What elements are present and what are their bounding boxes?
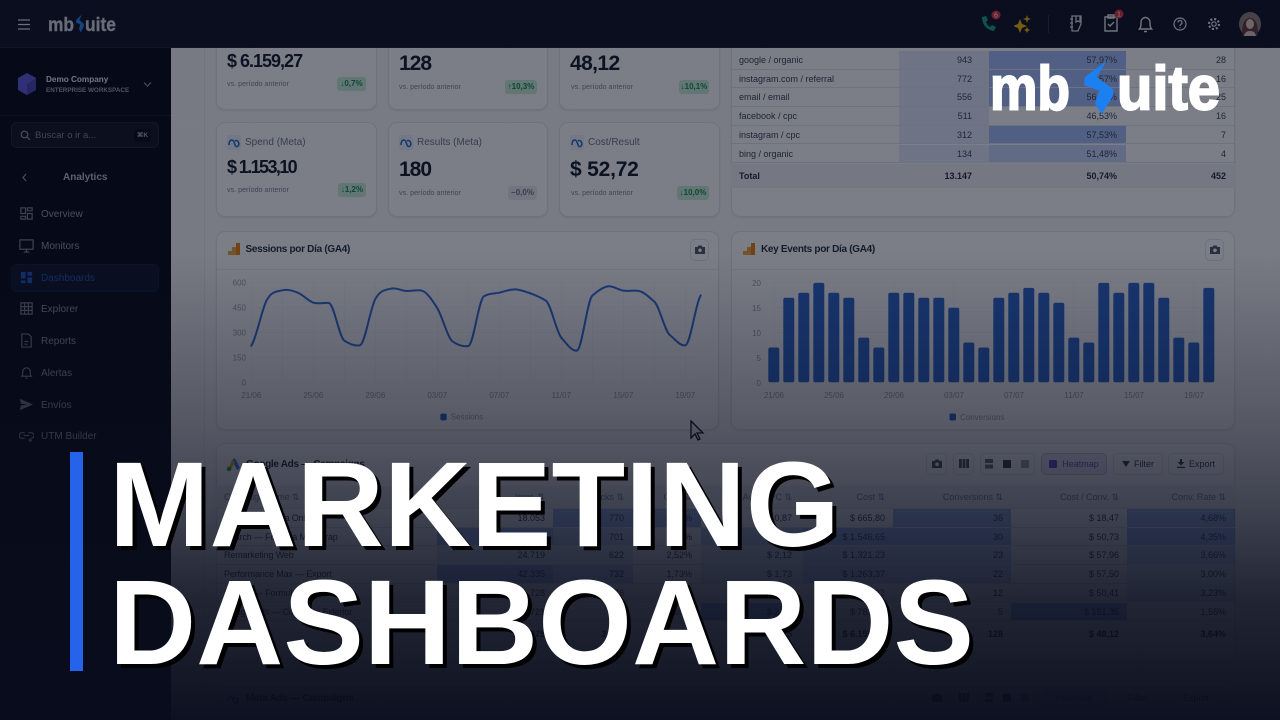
company switcher <box>0 48 171 116</box>
nav item: envios <box>20 399 72 411</box>
button: heatmap: Heatmap <box>1062 459 1099 469</box>
row 2: 29.811 <box>518 532 545 542</box>
row 6: $ 2,43 <box>767 606 792 616</box>
row 1: 4,68% <box>1200 513 1226 523</box>
row: email <box>731 88 1235 107</box>
row 1: $ 0,87 <box>767 513 792 523</box>
table header: Clicks ⇅ <box>590 492 624 502</box>
row 1 <box>216 509 1235 528</box>
icon: mouse cursor <box>690 420 704 441</box>
panel: traffic sources table <box>731 30 1235 217</box>
row: total: Total <box>739 171 760 181</box>
KPI card: conversions: vs. período anterior <box>399 82 461 91</box>
row: google organic: 28 <box>1216 55 1226 65</box>
table header: Cost ⇅ <box>856 492 885 502</box>
table header: Cost / Conv. ⇅ <box>1060 492 1119 502</box>
title <box>109 437 974 690</box>
panel title: Meta Ads — Campaigns <box>246 693 354 704</box>
button: heatmap <box>1041 453 1107 475</box>
KPI card: spend meta: $ 1.153,10 <box>227 157 296 177</box>
row: email: 556 <box>957 92 972 102</box>
row total: $ 48,12 <box>1089 629 1119 639</box>
button: columns <box>953 453 974 475</box>
row 1: $ 18,47 <box>1089 513 1119 523</box>
table header: Avg. CPC ⇅ <box>743 492 792 502</box>
row: instagram cpc: instagram / cpc <box>739 130 800 140</box>
icon: chevron <box>144 82 152 87</box>
button: camera <box>690 239 709 261</box>
row: instagram referral: 772 <box>957 74 972 84</box>
row 2: 4,35% <box>1200 532 1226 542</box>
search box <box>11 122 159 148</box>
row: google organic <box>731 51 1235 70</box>
bar chart: conversions: 29/06 <box>884 391 905 400</box>
KPI card: conversions: 128 <box>399 52 431 75</box>
row total: 3,64% <box>1200 629 1226 639</box>
nav item: utm builder <box>19 431 97 442</box>
line chart: sessions: 300 <box>233 328 247 337</box>
row: total: 452 <box>1211 171 1226 181</box>
row 4: Performance Max — Export <box>224 569 331 579</box>
accent bar <box>70 452 83 671</box>
row: google organic: google / organic <box>739 55 803 65</box>
icon: phone with badge: 6 <box>994 12 998 20</box>
line chart: sessions: 29/06 <box>365 391 386 400</box>
table header: Conv. Rate ⇅ <box>1172 492 1226 502</box>
nav item: reports: Reports <box>41 336 76 347</box>
row 3: 2,52% <box>666 550 692 560</box>
row 6: 5 <box>998 606 1003 616</box>
row: facebook cpc: 511 <box>958 111 972 121</box>
button: columns <box>953 687 974 709</box>
title: MARKETING <box>109 437 840 572</box>
line chart: sessions: 07/07 <box>489 391 510 400</box>
panel: google ads campaigns <box>216 443 1235 663</box>
bar chart: conversions: 19/07 <box>1184 391 1205 400</box>
bar chart: conversions: 15 <box>752 304 762 313</box>
row: google organic: 943 <box>957 55 972 65</box>
line chart: sessions: 11/07 <box>552 391 572 400</box>
row 2: $ 1.546,65 <box>842 532 885 542</box>
section title: Analytics <box>63 172 107 183</box>
row 6: $ 151,35 <box>1084 606 1119 616</box>
row 4 <box>216 565 1235 584</box>
row total: 134.075 <box>512 629 545 639</box>
bar chart: conversions: 20 <box>752 279 762 288</box>
row 3: 622 <box>609 550 624 560</box>
line chart: sessions: 450 <box>233 304 247 313</box>
row 4: 22 <box>993 569 1003 579</box>
line chart: sessions <box>232 279 702 422</box>
icon: analytics <box>228 243 240 255</box>
KPI card: conversions: ↑10,3% <box>508 82 534 91</box>
bar chart: conversions: 5 <box>757 354 762 363</box>
button: camera <box>926 687 947 709</box>
KPI card: cost per result: vs. período anterior <box>571 188 633 197</box>
button: filter <box>1113 453 1163 475</box>
nav item: dashboards active <box>11 264 159 292</box>
row 1: Search — Marca Online <box>224 513 317 523</box>
row 6: Google Ads — Comercio Exterior <box>224 606 352 616</box>
nav item: monitors: Monitors <box>41 241 79 252</box>
row total: 128 <box>988 629 1003 639</box>
button: filter: Filter <box>1134 459 1154 469</box>
row 2: $ 2,21 <box>767 532 792 542</box>
row 4: $ 1,73 <box>767 569 792 579</box>
row 3: Remarketing Web <box>224 550 294 560</box>
row 6: 1,55% <box>1200 606 1226 616</box>
nav item: reports <box>21 333 76 348</box>
button: heatmap <box>1041 687 1107 709</box>
KPI card: cost per conversion: 48,12 <box>570 52 620 75</box>
row 2: $ 50,73 <box>1089 532 1119 542</box>
workspace label: ENTERPRISE WORKSPACE <box>46 86 129 94</box>
row: instagram cpc: 57,53% <box>1086 130 1117 140</box>
row 5: Search — Formulas <box>224 588 301 598</box>
bar chart: conversions: Conversions <box>960 413 1004 422</box>
row 6: 8,65% <box>666 606 692 616</box>
row: facebook cpc: 16 <box>1216 111 1226 121</box>
row 5: 376 <box>609 588 624 598</box>
row 4: $ 57,50 <box>1089 569 1119 579</box>
row: instagram referral: instagram.com / referral <box>739 74 834 84</box>
icon: analytics <box>743 243 755 255</box>
icon: search <box>20 130 30 140</box>
row: instagram referral <box>731 70 1235 88</box>
row: bing organic: 51,48% <box>1086 148 1117 158</box>
icon: clipboard with badge <box>1104 10 1124 32</box>
row total: 4,77% <box>666 629 692 639</box>
table header: Impr. ⇅ <box>515 492 545 502</box>
panel: sessions per day chart <box>216 231 719 430</box>
bar chart: conversions: 15/07 <box>1124 391 1145 400</box>
KPI card: total cost <box>216 30 377 110</box>
row: facebook cpc: facebook / cpc <box>739 111 797 121</box>
nav item: overview <box>20 207 83 220</box>
panel title: Google Ads — Campaigns <box>246 459 365 470</box>
row: instagram cpc <box>731 126 1235 144</box>
row: email: email / email <box>739 92 790 102</box>
row: total: 13.147 <box>944 171 972 181</box>
row 5 <box>216 584 1235 602</box>
row 4: 3,00% <box>1200 569 1226 579</box>
nav item: alertas <box>20 367 72 379</box>
bar chart: conversions: 07/07 <box>1004 391 1025 400</box>
toolbar: meta ads <box>926 687 1224 709</box>
KPI card: total cost: ↓0,7% <box>340 79 363 88</box>
row 5: $ 1,61 <box>767 588 792 598</box>
row 1: $ 665,80 <box>850 513 885 523</box>
KPI card: cost per conversion: vs. período anterior <box>571 82 633 91</box>
icon: help <box>1173 17 1187 31</box>
row 4: 732 <box>609 569 624 579</box>
row 3: $ 1.321,23 <box>842 550 885 560</box>
KPI card: cost per result <box>559 122 720 217</box>
button: export: Export <box>1183 693 1209 703</box>
row: bing organic: 4 <box>1221 148 1226 158</box>
row: instagram cpc: 7 <box>1221 130 1226 140</box>
KPI card: results meta <box>388 122 548 217</box>
row: total: 50,74% <box>1086 171 1117 181</box>
sidebar <box>0 48 171 720</box>
KPI card: cost per result: ↓10,0% <box>680 188 706 197</box>
row: email: 56,12% <box>1086 92 1117 102</box>
row: google organic: 57,97% <box>1086 55 1117 65</box>
nav item: explorer <box>20 302 78 315</box>
table: google ads campaigns <box>224 492 1235 639</box>
KPI card: total cost: $ 6.159,27 <box>227 51 302 71</box>
line chart: sessions: Sessions <box>451 413 483 422</box>
line chart: sessions: 0 <box>242 378 247 387</box>
bar chart: conversions <box>752 279 1214 422</box>
KPI card: results meta: Results (Meta) <box>417 137 482 148</box>
row 3: 3,66% <box>1200 550 1226 560</box>
section back arrow <box>22 174 26 182</box>
icon: bell <box>1138 16 1153 32</box>
line chart: sessions: 15/07 <box>613 391 634 400</box>
row: email: 25 <box>1216 92 1226 102</box>
row 1: 770 <box>609 513 624 523</box>
line chart: sessions: 25/06 <box>303 391 324 400</box>
shortcut key: ⌘K <box>137 132 148 139</box>
icon: company logo <box>18 73 36 95</box>
icon: google ads <box>226 458 240 472</box>
button: filter: Filter <box>1128 693 1148 703</box>
table header: CTR ⇅ <box>663 492 692 502</box>
row 6: 3.721 <box>522 606 545 616</box>
panel: key events per day chart <box>731 231 1235 430</box>
row 5: $ 604,92 <box>850 588 885 598</box>
bar chart: conversions: 21/06 <box>764 391 785 400</box>
KPI card: total cost: vs. período anterior <box>227 79 289 88</box>
row 5: 3,23% <box>1200 588 1226 598</box>
small logo: mb <box>48 15 74 36</box>
icon: hamburger menu <box>18 19 30 30</box>
button: export <box>1168 453 1224 475</box>
shortcut key <box>134 129 151 142</box>
icon: clipboard with badge: 1 <box>1117 12 1121 18</box>
row: facebook cpc <box>731 107 1235 126</box>
KPI card: conversions <box>388 30 548 110</box>
row total: $ 1,75 <box>767 629 792 639</box>
row total <box>224 629 1226 639</box>
KPI card: cost per result: $ 52,72 <box>570 158 639 181</box>
bar chart: conversions: 10 <box>752 329 762 338</box>
row: bing organic: 134 <box>957 148 972 158</box>
KPI card: spend meta: vs. período anterior <box>227 185 289 194</box>
bar chart: conversions: 0 <box>757 379 762 388</box>
row 1: 18.053 <box>517 513 545 523</box>
nav item: monitors <box>19 239 79 253</box>
table header: Campaign Name ⇅ <box>224 492 299 502</box>
row 2: 701 <box>609 532 624 542</box>
toolbar: google ads <box>932 453 1215 475</box>
table header: Conversions ⇅ <box>943 492 1003 502</box>
KPI card: cost per result: Cost/Result <box>588 137 640 148</box>
button: heatmap: Heatmap <box>1056 693 1092 703</box>
nav label: dashboards <box>20 272 95 284</box>
row 4: $ 1.263,37 <box>842 569 885 579</box>
row 2: 30 <box>993 532 1003 542</box>
row 6: $ 781,30 <box>850 606 885 616</box>
line chart: sessions: 03/07 <box>427 391 448 400</box>
top bar <box>0 0 1280 48</box>
row 1: 36 <box>993 513 1003 523</box>
row 3: 23 <box>993 550 1003 560</box>
search placeholder: Buscar o ir a... <box>35 130 96 140</box>
KPI card: results meta: 180 <box>399 158 431 181</box>
bar chart: conversions: 03/07 <box>944 391 965 400</box>
row 5: 12 <box>993 588 1003 598</box>
panel: meta ads campaigns <box>216 680 1235 720</box>
KPI card: spend meta <box>216 122 377 217</box>
row total: $ 6.159,27 <box>842 629 885 639</box>
table header <box>216 486 1235 509</box>
chart title: Key Events por Día (GA4) <box>761 244 875 255</box>
icon: settings <box>1208 18 1220 30</box>
row: facebook cpc: 46,53% <box>1086 111 1117 121</box>
row 4: 42.335 <box>517 569 545 579</box>
row 3: $ 57,96 <box>1089 550 1119 560</box>
bar chart: conversions: 25/06 <box>824 391 845 400</box>
row 2: Search — Fórmula Magistrap <box>224 532 338 542</box>
line chart: sessions: 21/06 <box>241 391 262 400</box>
bar chart: conversions: 11/07 <box>1064 391 1084 400</box>
nav item: envios: Envíos <box>41 400 72 411</box>
row: instagram referral: 16 <box>1216 74 1226 84</box>
row 6 <box>216 602 1235 621</box>
button group: density <box>980 687 1035 709</box>
KPI card: cost per conversion <box>559 30 720 110</box>
icon: notebook <box>1070 15 1082 32</box>
row 1: 4,27% <box>666 513 692 523</box>
KPI card: spend meta: Spend (Meta) <box>245 137 306 148</box>
row 3: $ 2,12 <box>767 550 792 560</box>
row: instagram referral: 57,57% <box>1086 74 1117 84</box>
row 6: 322 <box>609 606 624 616</box>
nav item: explorer: Explorer <box>41 304 78 315</box>
row 5: $ 50,41 <box>1089 588 1119 598</box>
line chart: sessions: 600 <box>233 279 247 288</box>
button: export: Export <box>1189 459 1215 469</box>
avatar <box>1239 12 1261 36</box>
row: bing organic <box>731 144 1235 163</box>
nav label: dashboards: Dashboards <box>41 273 95 284</box>
line chart: sessions: 150 <box>233 354 247 363</box>
row total: 3.523 <box>601 629 624 639</box>
table: traffic sources rows <box>732 51 1234 181</box>
KPI card: spend meta: ↓1,2% <box>341 185 363 194</box>
row 5: 3,21% <box>666 588 692 598</box>
line chart: sessions: 19/07 <box>675 391 696 400</box>
small logo <box>48 14 116 36</box>
divider <box>1048 15 1049 33</box>
row 4: 1,73% <box>666 569 692 579</box>
bolt <box>1084 61 1113 114</box>
KPI card: cost per conversion: ↓10,1% <box>681 82 707 91</box>
chart title: Sessions por Día (GA4) <box>246 244 350 255</box>
button group: density <box>980 453 1035 475</box>
KPI card: results meta: vs. período anterior <box>399 188 461 197</box>
nav item: alertas: Alertas <box>41 368 72 379</box>
icon: meta <box>227 692 241 706</box>
icon: phone with badge <box>982 10 1000 31</box>
row: instagram cpc: 312 <box>957 130 972 140</box>
nav item: overview: Overview <box>41 209 83 220</box>
button: filter <box>1113 687 1163 709</box>
button: camera <box>926 453 947 475</box>
title: DASHBOARDS <box>109 555 974 690</box>
row 5: 11.728 <box>518 588 545 598</box>
row 3: 24.719 <box>517 550 545 560</box>
button: export <box>1168 687 1224 709</box>
logo: mbSuite <box>990 55 1220 117</box>
row: bing organic: bing / organic <box>739 148 793 158</box>
row 3 <box>216 546 1235 565</box>
row 2: 1,85% <box>666 532 692 542</box>
content column separator <box>171 48 205 720</box>
row: total <box>731 164 1235 188</box>
button: camera <box>1205 239 1224 261</box>
KPI card: results meta: −0,0% <box>511 188 534 197</box>
nav item: utm builder: UTM Builder <box>41 431 97 442</box>
row 2 <box>216 528 1235 546</box>
row total: Total <box>224 629 244 639</box>
icon: sparkles <box>1014 15 1031 33</box>
company name: Demo Company <box>46 75 108 84</box>
